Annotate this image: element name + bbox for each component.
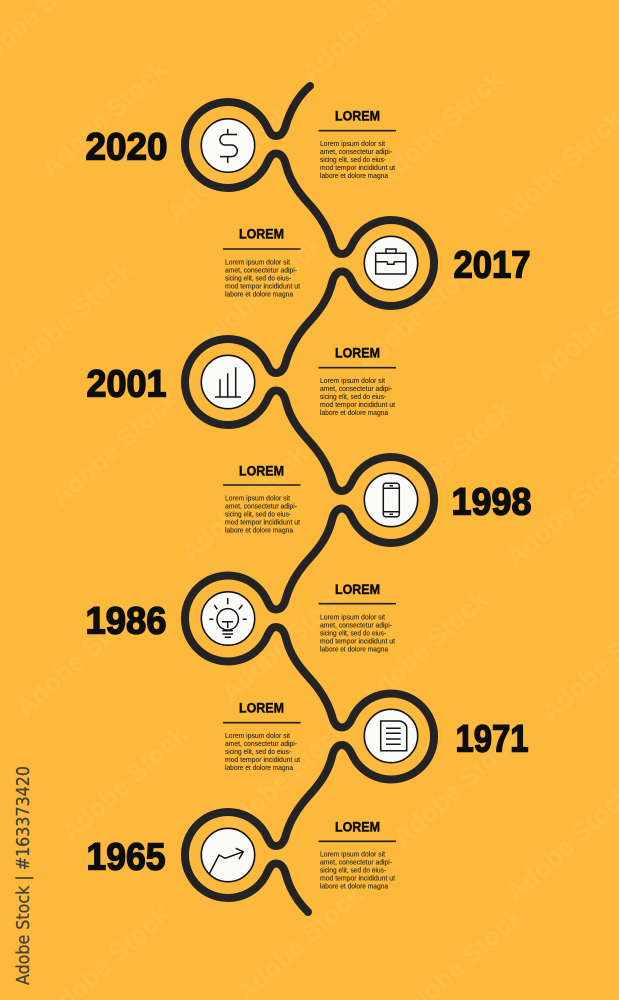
text block: lorem 5: mod tempor incididunt ut <box>320 636 395 645</box>
text: Adobe Stock <box>370 64 508 193</box>
text block: lorem 5: amet, consectetur adipi- <box>320 620 392 629</box>
milestone 1965 <box>86 818 396 891</box>
text: Adobe Stock <box>387 724 525 853</box>
icon: bar chart <box>201 355 255 409</box>
text block: lorem 6: labore et dolore magna <box>225 763 294 772</box>
year 1965: 1965 <box>86 836 166 878</box>
text block: lorem 2: Lorem ipsum dolor sit <box>225 257 290 266</box>
text block: lorem 7: mod tempor incididunt ut <box>320 874 395 883</box>
text block: lorem 1: Lorem ipsum dolor sit <box>320 139 385 148</box>
text block: lorem 1: sicing elit, sed do eius- <box>320 155 386 164</box>
text block: lorem 1: labore et dolore magna <box>320 171 389 180</box>
milestone 1986 <box>86 581 396 653</box>
text: Adobe Stock <box>10 594 148 723</box>
text: Adobe Stock <box>0 254 138 383</box>
year 2017: 2017 <box>454 244 530 286</box>
text: Adobe Stock <box>55 719 193 848</box>
text block: lorem 2: LOREM <box>239 226 284 242</box>
text block: lorem 3: Lorem ipsum dolor sit <box>320 376 385 385</box>
text block: lorem 2: amet, consectetur adipi- <box>225 265 297 274</box>
text block: lorem 6 <box>223 700 300 772</box>
text: Adobe Stock <box>45 384 183 513</box>
text block: lorem 2: sicing elit, sed do eius- <box>225 273 291 282</box>
text block: lorem 1: amet, consectetur adipi- <box>320 147 392 156</box>
text block: lorem 1 <box>318 108 396 180</box>
year 1998: 1998 <box>452 482 532 524</box>
text block: lorem 7: amet, consectetur adipi- <box>320 858 392 867</box>
milestone 1971 <box>223 700 528 772</box>
text: Adobe Stock <box>190 229 328 358</box>
text block: lorem 5: sicing elit, sed do eius- <box>320 628 386 637</box>
year 2020: 2020 <box>86 126 168 168</box>
text block: lorem 3 <box>318 344 396 417</box>
text block: lorem 4: LOREM <box>239 462 284 478</box>
text block: lorem 5: labore et dolore magna <box>320 644 389 653</box>
text block: lorem 2: mod tempor incididunt ut <box>225 281 300 290</box>
year 1971: 1971 <box>456 718 528 760</box>
text block: lorem 3: LOREM <box>335 344 380 360</box>
year 1986: 1986 <box>86 600 166 642</box>
text: Adobe Stock <box>35 54 173 183</box>
text block: lorem 4: amet, consectetur adipi- <box>225 502 297 511</box>
text: Adobe Stock <box>350 249 488 378</box>
icon: phone <box>364 473 418 527</box>
text block: lorem 4: sicing elit, sed do eius- <box>225 510 291 519</box>
text block: lorem 4: mod tempor incididunt ut <box>225 518 300 527</box>
text block: lorem 5: LOREM <box>335 581 380 597</box>
text: Adobe Stock <box>380 394 518 523</box>
text block: lorem 5: Lorem ipsum dolor sit <box>320 612 385 621</box>
text block: lorem 5 <box>318 581 396 653</box>
text block: lorem 3: sicing elit, sed do eius- <box>320 392 386 401</box>
text block: lorem 1: mod tempor incididunt ut <box>320 163 395 172</box>
text block: lorem 4: Lorem ipsum dolor sit <box>225 494 290 503</box>
text block: lorem 7: Lorem ipsum dolor sit <box>320 850 385 859</box>
text block: lorem 3: amet, consectetur adipi- <box>320 384 392 393</box>
text block: lorem 6: LOREM <box>239 700 284 716</box>
stock watermark id: Adobe Stock | #163373420 <box>13 766 34 985</box>
text block: lorem 6: mod tempor incididunt ut <box>225 755 300 764</box>
text block: lorem 4 <box>223 462 300 535</box>
text: Adobe Stock <box>355 584 493 713</box>
text block: lorem 6: sicing elit, sed do eius- <box>225 747 291 756</box>
icon: dollar <box>201 119 255 172</box>
icon: trend arrow <box>201 828 255 882</box>
text block: lorem 6: Lorem ipsum dolor sit <box>225 731 290 740</box>
text block: lorem 7: LOREM <box>335 818 380 834</box>
text block: lorem 3: mod tempor incididunt ut <box>320 400 395 409</box>
text: Adobe Stock <box>215 579 353 708</box>
text: Adobe Stock <box>175 439 313 568</box>
milestone 1998 <box>223 462 532 535</box>
milestone 2001 <box>86 344 396 417</box>
milestone 2017 <box>223 226 530 298</box>
text block: lorem 3: labore et dolore magna <box>320 408 389 417</box>
text: Adobe Stock <box>215 714 353 843</box>
text block: lorem 1: LOREM <box>335 108 380 124</box>
text block: lorem 7 <box>318 818 396 891</box>
icon: document <box>364 709 418 763</box>
icon: briefcase <box>364 236 418 290</box>
text: Adobe Stock <box>160 99 298 228</box>
timeline path <box>185 86 434 912</box>
text block: lorem 7: sicing elit, sed do eius- <box>320 866 386 875</box>
text block: lorem 2: labore et dolore magna <box>225 289 294 298</box>
text block: lorem 7: labore et dolore magna <box>320 882 389 891</box>
year 2001: 2001 <box>86 364 166 406</box>
text block: lorem 6: amet, consectetur adipi- <box>225 739 297 748</box>
text block: lorem 4: labore et dolore magna <box>225 526 294 535</box>
text block: lorem 2 <box>223 226 300 298</box>
milestone 2020 <box>86 108 396 180</box>
icon: light bulb <box>201 592 255 645</box>
